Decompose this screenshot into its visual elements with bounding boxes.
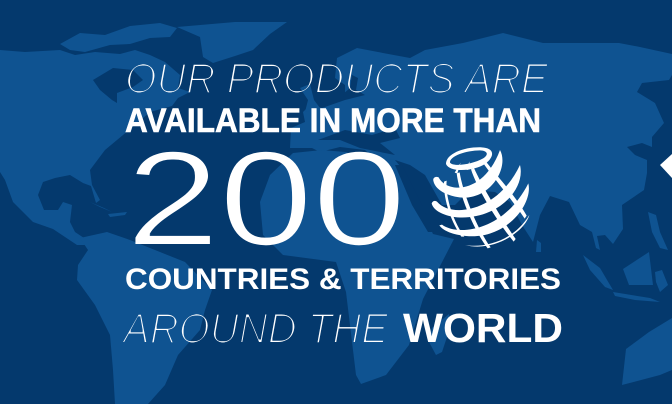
map: Sri Lanka [536,240,541,252]
navigation arrow [660,154,672,178]
globe: meridians [444,181,464,237]
map: Caribbean islands [90,202,127,217]
map: Arctic islands [60,23,177,52]
heading line: available in more than: AVAILABLE IN MORE THAN [125,102,541,140]
map: North America [0,50,190,245]
heading line: world: WORLD [403,305,563,351]
icon: globe [432,147,529,248]
map: Greenland [177,22,287,63]
map: Mediterranean sea [318,128,400,155]
map: South America [77,232,212,404]
heading line: our products are: OUR PRODUCTS ARE [125,55,549,103]
map: Australia [622,318,672,385]
globe: ring spokes [455,161,485,173]
map: Hudson Bay [93,68,143,103]
globe: latitude bands [433,150,502,198]
big number 200: 200 [126,123,406,274]
map: Africa [260,150,454,384]
map: Eurasia [290,33,672,250]
heading line: around the: AROUND THE [120,305,389,353]
globe: top ring [446,147,492,170]
map: Indonesia and Philippines [583,212,668,302]
map: Red Sea [395,165,434,232]
map: Baltic sea [343,75,365,100]
map: Madagascar [429,314,451,355]
heading line: countries and territories: COUNTRIES & TERRITORIES [125,263,561,296]
map: UK and Ireland [300,84,320,112]
